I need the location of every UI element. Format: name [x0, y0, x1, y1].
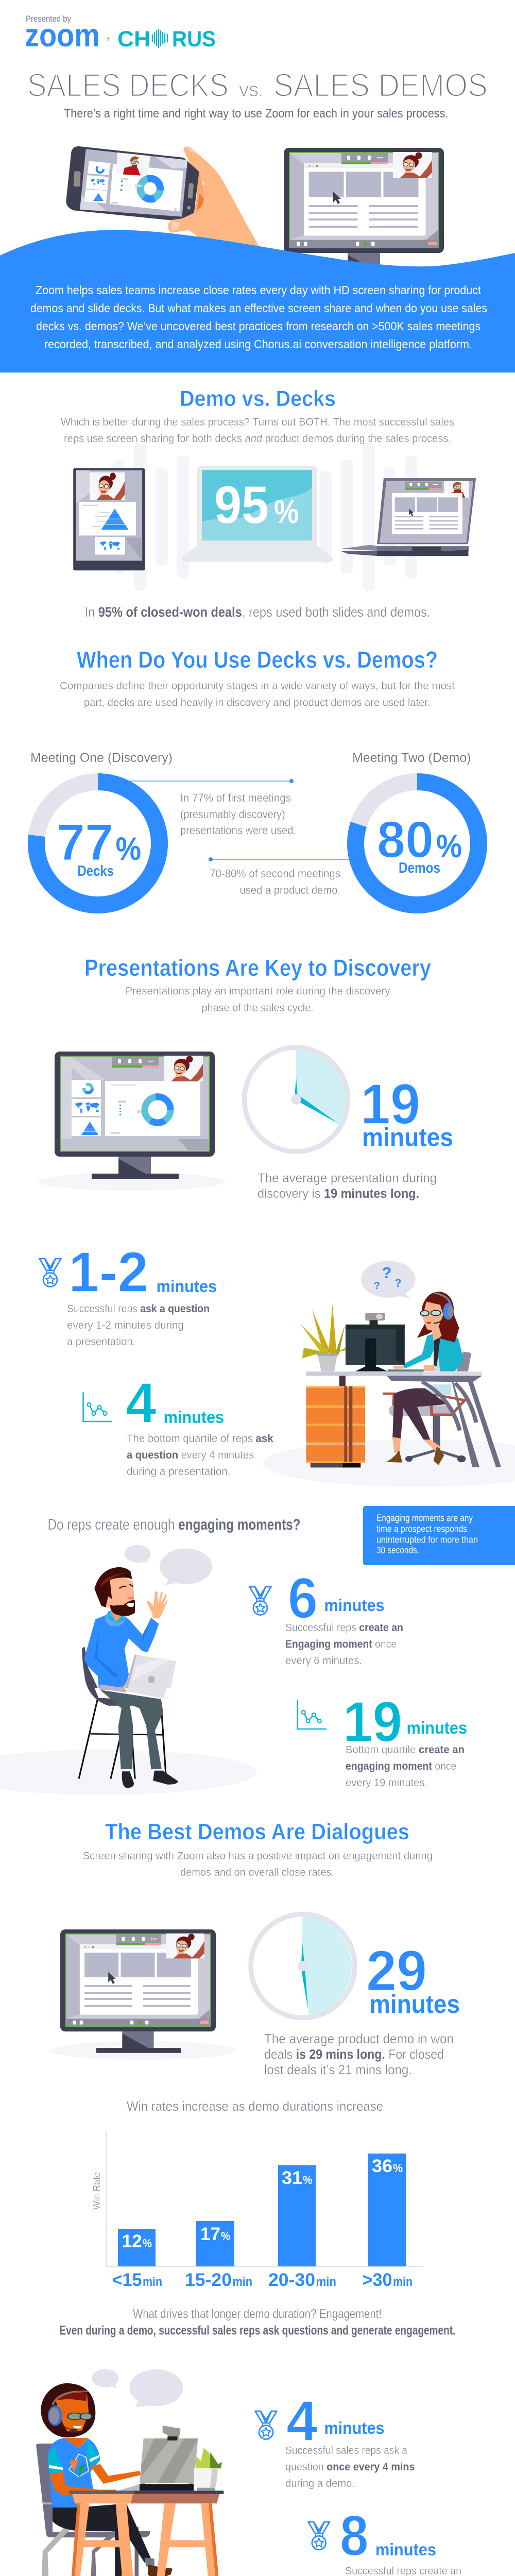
stat: 1-2 minutes	[68, 1241, 217, 1304]
text: 4 minutes	[127, 1433, 273, 1478]
text: what drives longer demos: What drives that longer demo duration? Engagement!	[133, 2307, 382, 2321]
illustration: hand holding phone	[66, 146, 263, 252]
clock: 29 minutes	[251, 1914, 355, 2018]
callout: engaging moments definition: Engaging moments are any	[376, 1513, 473, 1523]
intro text: decks vs. demos? We’ve uncovered best practices from research on >500K sales meetings	[36, 319, 480, 333]
text: presentations intro: phase of the sales cycle.	[202, 1002, 314, 1014]
note: second meetings: used a product demo.	[240, 884, 340, 896]
text: 29 minutes	[264, 2031, 454, 2077]
illustration: man with laptop on stool	[79, 1545, 212, 1788]
title: SALES DEMOS	[273, 67, 488, 104]
callout: engaging moments definition: uninterrupted for more than	[376, 1534, 478, 1545]
note: first meetings: (presumably discovery)	[180, 808, 285, 821]
connector line to second meetings note	[209, 857, 349, 861]
heading: presentations: Presentations Are Key to Discovery	[84, 955, 431, 981]
stat: 6 minutes: 6	[288, 1567, 318, 1630]
title	[27, 67, 488, 104]
donut: 77% decks: 77	[57, 814, 113, 871]
donut: 77% decks	[36, 782, 160, 905]
text: 1-2 minutes: Successful reps ask a question	[67, 1303, 210, 1315]
plus sign: +	[106, 34, 111, 44]
bar 31%	[278, 2165, 316, 2266]
stat: 8 minutes	[340, 2504, 436, 2568]
text: 6 minutes: Engaging moment once	[285, 1638, 397, 1650]
clock: 19 minutes	[244, 1047, 348, 1151]
icon: medal	[39, 1259, 61, 1287]
text: 19 minutes bottom quartile: engaging moment once	[346, 1760, 456, 1772]
95% stat: 95	[214, 476, 269, 534]
text: best demos intro: Screen sharing with Zoom also has a positive impact on engagement during	[83, 1850, 433, 1862]
center laptop	[182, 466, 333, 562]
stat: 8 minutes: 8	[340, 2504, 369, 2568]
callout: engaging moments definition	[363, 1506, 515, 1565]
donut: 77% decks: %	[115, 831, 141, 867]
floor shadow	[263, 1439, 515, 1487]
donut: 80% demos	[355, 782, 479, 905]
intro text: Zoom helps sales teams increase close rates every day with HD screen sharing for product	[36, 283, 482, 297]
stat: 4 minutes	[126, 1371, 224, 1435]
stat: 19 minutes bottom quartile	[343, 1690, 467, 1754]
category labels: min	[316, 2275, 336, 2289]
callout: engaging moments definition: time a prospect responds	[376, 1524, 467, 1534]
bubbles	[92, 2369, 183, 2407]
stat: 19 minutes bottom quartile: 19	[343, 1690, 402, 1754]
text: 95% closed-won: In 95% of closed-won deals, reps used both slides and demos.	[84, 604, 431, 620]
text: 6 minutes: every 6 minutes.	[285, 1655, 362, 1667]
text: engaging moments question: Do reps create enough engaging moments?	[47, 1516, 301, 1533]
floor shadow	[0, 1750, 257, 1795]
text: 4 minutes: The bottom quartile of reps ask	[127, 1433, 273, 1445]
illustration: monitor with slides	[55, 1052, 215, 1179]
category labels: min	[393, 2275, 413, 2289]
bar 17%: 17	[200, 2224, 220, 2244]
title: VS.	[239, 83, 263, 100]
note: second meetings: 70-80% of second meetings	[210, 867, 340, 880]
bar 31%: %	[303, 2173, 312, 2187]
icon: medal	[308, 2522, 330, 2550]
monitor shadow	[49, 2041, 236, 2060]
intro text: demos and slide decks. But what makes an effective screen share and when do you use sales	[30, 301, 487, 315]
bar 12%: 12	[122, 2231, 142, 2251]
logo: zoom: zoom	[25, 18, 100, 54]
stat: 4 minutes demo: 4	[286, 2389, 318, 2453]
blue wave band	[0, 230, 515, 372]
icon: chart	[298, 1700, 327, 1729]
chart title: Win rates increase as demo durations increase	[127, 2098, 383, 2114]
category labels: 20-30	[268, 2270, 315, 2290]
callout: engaging moments definition: 30 seconds.	[376, 1545, 419, 1555]
intro text	[30, 283, 487, 351]
donut: 80% demos: 80	[377, 811, 434, 869]
question marks: ?	[394, 1277, 402, 1290]
text: 1-2 minutes	[67, 1303, 210, 1348]
heading: demo vs decks: Demo vs. Decks	[180, 386, 336, 411]
label: meeting two: Meeting Two (Demo)	[352, 751, 471, 765]
logo: chorus: CH	[117, 27, 150, 52]
donut: 77% decks: Decks	[77, 863, 114, 879]
illustration: woman at desk	[301, 1261, 501, 1467]
text: 19 minutes bottom quartile: Bottom quartile create an	[346, 1744, 465, 1756]
stat: 8 minutes: minutes	[375, 2540, 436, 2559]
category labels	[112, 2270, 413, 2290]
stat: 6 minutes	[288, 1567, 384, 1630]
heading: best demos: The Best Demos Are Dialogues	[105, 1819, 409, 1844]
bar 36%	[368, 2154, 406, 2266]
text: 19 minutes bottom quartile: every 19 minutes.	[346, 1777, 427, 1789]
text: 4 minutes demo	[285, 2445, 415, 2489]
text: 29 minutes: The average product demo in won	[264, 2031, 454, 2046]
note: first meetings: In 77% of first meetings	[180, 791, 291, 804]
stat: 1-2 minutes: 1-2	[68, 1241, 148, 1304]
icon: chart	[83, 1392, 112, 1421]
icon: medal	[255, 2411, 277, 2439]
illustration: monitor web page	[60, 1929, 216, 2053]
text: what drives longer demos	[59, 2307, 455, 2338]
bar 36%: 36	[372, 2156, 392, 2176]
text: demo vs decks intro	[61, 416, 454, 445]
heading: when: When Do You Use Decks vs. Demos?	[77, 647, 438, 673]
stat: 4 minutes: minutes	[164, 1408, 224, 1427]
text: 29 minutes: lost deals it’s 21 mins long.	[264, 2062, 412, 2077]
text: 19 minutes: discovery is 19 minutes long.	[258, 1187, 419, 1201]
note: second meetings	[210, 867, 340, 896]
stat: 19 minutes bottom quartile: minutes	[407, 1718, 467, 1737]
category labels: min	[233, 2275, 252, 2289]
category labels: <15	[112, 2270, 142, 2290]
category labels: min	[143, 2275, 162, 2289]
subtitle: There’s a right time and right way to use Zoom for each in your sales process.	[64, 107, 448, 121]
bar 17%	[196, 2221, 234, 2266]
tablet	[73, 468, 145, 570]
presented by: Presented by	[26, 14, 71, 24]
bar 12%: %	[143, 2236, 152, 2250]
text: 29 minutes: deals is 29 mins long. For closed	[264, 2046, 444, 2062]
bubbles	[125, 1545, 212, 1585]
stat: 19 minutes	[360, 1073, 453, 1152]
connector line to first meetings note	[130, 779, 294, 783]
text: 19 minutes bottom quartile	[346, 1744, 465, 1789]
donut: 80% demos: %	[436, 828, 462, 865]
stat: 1-2 minutes: minutes	[157, 1277, 217, 1296]
text: 4 minutes: a question every 4 minutes	[127, 1449, 254, 1461]
stat: 4 minutes: 4	[126, 1371, 157, 1435]
stat: 4 minutes demo	[286, 2389, 384, 2453]
y axis label: Win Rate	[92, 2172, 102, 2210]
text: 4 minutes demo: question once every 4 mins	[285, 2461, 415, 2473]
text: 1-2 minutes: every 1-2 minutes during	[67, 1319, 184, 1331]
95% stat: %	[274, 493, 299, 530]
logo: chorus	[117, 27, 216, 52]
side laptop	[340, 478, 476, 556]
text: when intro: Companies define their opportunity stages in a wide variety of ways, but for the most	[60, 680, 455, 692]
bar chart: win rate by demo duration	[92, 2131, 423, 2290]
stat: 29 minutes	[366, 1939, 460, 2019]
donut: 80% demos: Demos	[399, 860, 440, 876]
category labels: 15-20	[185, 2270, 232, 2290]
bar 12%	[118, 2229, 156, 2266]
text: when intro	[60, 680, 455, 709]
text: presentations intro: Presentations play an important role during the discovery	[126, 985, 390, 997]
text: 4 minutes demo: Successful sales reps ask a	[285, 2445, 407, 2456]
question marks	[374, 1264, 402, 1292]
category labels: >30	[363, 2270, 392, 2290]
text: 6 minutes	[285, 1622, 403, 1667]
stat: 6 minutes: minutes	[324, 1596, 384, 1615]
bar 17%: %	[221, 2229, 230, 2243]
stat: 19 minutes: 19	[360, 1073, 420, 1136]
text: best demos intro: demos and on overall close rates.	[180, 1867, 334, 1878]
bar 31%: 31	[282, 2168, 302, 2188]
question marks: ?	[382, 1264, 391, 1282]
illustration: monitor with web page	[284, 148, 444, 275]
stat: 4 minutes demo: minutes	[324, 2418, 384, 2437]
logo: chorus: RUS	[172, 27, 216, 52]
stat: 19 minutes: minutes	[362, 1123, 453, 1152]
text: 19 minutes: The average presentation during	[258, 1171, 437, 1185]
illustration: woman with headset at table	[36, 2369, 224, 2576]
text: best demos intro	[83, 1850, 433, 1878]
question marks: ?	[374, 1280, 380, 1292]
stat: 29 minutes: 29	[366, 1939, 427, 2003]
label: meeting one: Meeting One (Discovery)	[30, 751, 173, 765]
note: first meetings: presentations were used.	[180, 824, 296, 837]
text: 4 minutes: during a presentation.	[127, 1466, 231, 1478]
text: presentations intro	[126, 985, 390, 1014]
devices illustration	[73, 443, 476, 591]
text: 1-2 minutes: a presentation.	[67, 1336, 135, 1348]
95% stat	[214, 476, 299, 534]
stat: 29 minutes: minutes	[369, 1990, 460, 2019]
icon: medal	[249, 1587, 271, 1615]
text: demo vs decks intro: reps use screen sharing for both decks and product demos during the sales process.	[64, 433, 451, 445]
intro text: recorded, transcribed, and analyzed using Chorus.ai conversation intelligence platform.	[44, 337, 472, 351]
note: first meetings	[180, 791, 296, 837]
monitor shadow	[38, 1173, 225, 1191]
text: 6 minutes: Successful reps create an	[285, 1622, 403, 1634]
speech bubble	[361, 1261, 416, 1298]
text: when intro: part, decks are used heavily in discovery and product demos are used later.	[84, 697, 431, 709]
text: 4 minutes demo: during a demo.	[285, 2478, 355, 2489]
title: SALES DECKS	[27, 67, 229, 104]
text: demo vs decks intro: Which is better during the sales process? Turns out BOTH. The most successful sales	[61, 416, 454, 428]
bar 36%: %	[393, 2161, 403, 2175]
text: 19 minutes	[258, 1171, 437, 1201]
